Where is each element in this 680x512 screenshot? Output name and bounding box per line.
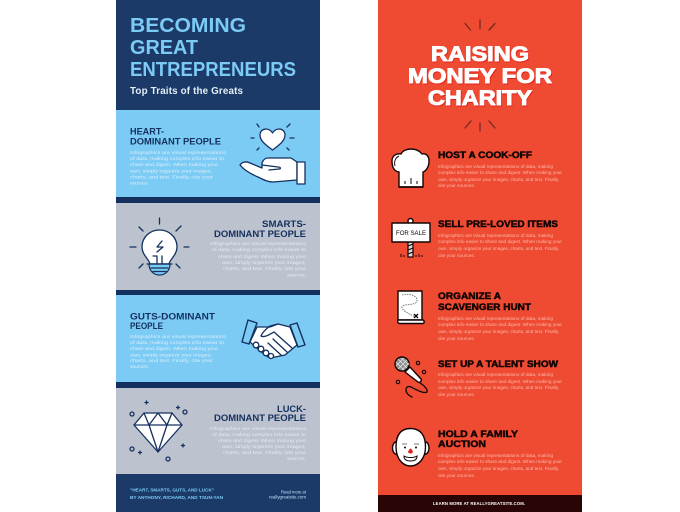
- body text: complex info easier to share and digest. When making your: [438, 379, 562, 384]
- body text: cite your sources.: [438, 392, 475, 397]
- footer: learn more: [378, 495, 582, 512]
- heading: PEOPLE: [130, 321, 163, 331]
- icon: microphone: [395, 357, 427, 397]
- heading: DOMINANT PEOPLE: [130, 136, 221, 146]
- icon: chef hat: [392, 149, 429, 187]
- heading: SELL PRE-LOVED ITEMS: [438, 219, 558, 229]
- body text: [130, 150, 227, 186]
- body text: cite your sources.: [438, 336, 475, 341]
- title: MONEY FOR: [409, 66, 553, 89]
- body text: [438, 233, 562, 258]
- read more link: reallygreatsite.com: [269, 494, 306, 500]
- body text: cite your sources.: [438, 253, 475, 258]
- rays above title: [465, 20, 495, 30]
- body text: sources.: [287, 272, 306, 278]
- body text: of data, making complex info easier to: [212, 432, 306, 438]
- title: RAISING: [432, 44, 530, 67]
- body text: Infographics are visual representations of data, making: [438, 164, 553, 169]
- item: organize a scavenger hunt: [398, 291, 562, 341]
- footer: sources: [116, 474, 320, 512]
- body text: share and digest. When making your: [130, 346, 218, 352]
- body text: own, simply organize your images,: [130, 168, 212, 174]
- body text: Infographics are visual representations of data, making: [438, 233, 553, 238]
- subtitle: Top Traits of the Greats: [130, 86, 244, 97]
- heading: DOMINANT PEOPLE: [214, 413, 306, 423]
- body text: sources.: [130, 364, 149, 370]
- body text: own, simply organize your images, charts, and text. Finally,: [438, 177, 559, 182]
- heading: DOMINANT PEOPLE: [214, 229, 306, 239]
- section: luck-dominant people: [116, 388, 320, 474]
- body text: share and digest. When making your: [130, 162, 218, 168]
- body text: [130, 334, 227, 370]
- icon: treasure map: [398, 291, 424, 324]
- body text: charts, and text. Finally, cite your: [130, 358, 213, 364]
- heading: GUTS-DOMINANT: [130, 311, 215, 321]
- body text: of data, making complex info easier to: [130, 156, 224, 162]
- body text: complex info easier to share and digest. When making your: [438, 322, 562, 327]
- body text: [210, 426, 307, 462]
- icon: handshake: [242, 320, 305, 358]
- body text: Infographics are visual representations: [210, 241, 307, 247]
- heading: LUCK-: [277, 404, 306, 414]
- body text: charts, and text. Finally, cite your: [130, 174, 213, 180]
- heading: [438, 429, 518, 449]
- heading: [214, 404, 306, 423]
- section: heart-dominant people: [116, 110, 320, 197]
- heading: SET UP A TALENT SHOW: [438, 359, 559, 369]
- heading: AUCTION: [438, 439, 486, 449]
- body text: of data, making complex info easier to: [212, 247, 306, 253]
- heading: [130, 126, 221, 146]
- icon: for sale sign: [392, 218, 430, 257]
- title: CHARITY: [428, 87, 532, 110]
- title: [408, 43, 553, 111]
- body text: Infographics are visual representations: [130, 334, 227, 340]
- body text: cite your sources.: [438, 473, 475, 478]
- panel: raising money for charity: [378, 0, 582, 512]
- heading: [438, 291, 532, 312]
- body text: Infographics are visual representations: [210, 426, 307, 432]
- item: set up a talent show: [395, 357, 562, 397]
- body text: own, simply organize your images, charts, and text. Finally,: [438, 329, 559, 334]
- body text: charts, and text. Finally, cite your: [223, 450, 306, 456]
- body text: Infographics are visual representations of data, making: [438, 316, 553, 321]
- heading: SCAVENGER HUNT: [438, 302, 532, 312]
- body text: complex info easier to share and digest. When making your: [438, 170, 562, 175]
- body text: own, simply organize your images,: [222, 260, 306, 266]
- icon: light bulb: [130, 218, 189, 275]
- heading: [214, 219, 306, 239]
- body text: complex info easier to share and digest. When making your: [438, 459, 562, 464]
- body text: sources.: [287, 456, 306, 462]
- read more link: [269, 490, 307, 500]
- body text: complex info easier to share and digest. When making your: [438, 239, 562, 244]
- citation: BY ANTHONY, RICHARD, AND TSUN-YAN: [130, 495, 223, 500]
- title: ENTREPRENEURS: [130, 58, 296, 81]
- body text: own, simply organize your images,: [130, 352, 212, 358]
- body text: cite your sources.: [438, 183, 475, 188]
- heading: HOLD A FAMILY: [438, 429, 518, 439]
- body text: charts, and text. Finally, cite your: [223, 266, 306, 272]
- body text: Infographics are visual representations: [130, 150, 227, 156]
- icon: clown face: [392, 428, 429, 466]
- body text: [438, 372, 562, 397]
- heading: HEART-: [130, 126, 164, 136]
- body text: sources.: [130, 180, 149, 186]
- body text: own, simply organize your images, charts, and text. Finally,: [438, 246, 559, 251]
- body text: share and digest. When making your: [218, 438, 306, 444]
- title: CHARITY: [429, 88, 533, 111]
- rays below title: [465, 121, 495, 131]
- icon: for sale sign: FOR SALE: [396, 230, 426, 237]
- heading: SMARTS-: [262, 219, 306, 229]
- body text: [438, 316, 562, 341]
- title: [130, 14, 296, 81]
- body text: own, simply organize your images, charts, and text. Finally,: [438, 385, 559, 390]
- body text: [210, 241, 307, 278]
- title: BECOMING: [130, 14, 246, 37]
- panel: becoming great entrepreneurs: [116, 0, 320, 512]
- heading: HOST A COOK-OFF: [438, 150, 533, 160]
- icon: hand holding heart: [240, 124, 305, 184]
- title: GREAT: [130, 36, 198, 59]
- citation: "HEART, SMARTS, GUTS, AND LUCK": [130, 488, 214, 492]
- section: guts-dominant people: [116, 295, 320, 382]
- footer: learn more: LEARN MORE AT REALLYGREATSITE.COM.: [433, 501, 525, 506]
- body text: Infographics are visual representations of data, making: [438, 453, 553, 458]
- heading: [130, 311, 215, 331]
- item: hold a family auction: [392, 428, 562, 478]
- item: host a cook-off: [392, 149, 562, 188]
- title: MONEY FOR: [408, 65, 552, 88]
- body text: of data, making complex info easier to: [130, 340, 224, 346]
- header panel: [116, 0, 320, 110]
- body text: [438, 453, 562, 478]
- icon: diamond: [130, 401, 187, 461]
- body text: Infographics are visual representations of data, making: [438, 372, 553, 377]
- heading: ORGANIZE A: [438, 291, 502, 301]
- section: smarts-dominant people: [116, 203, 320, 290]
- body text: [438, 164, 562, 188]
- body text: own, simply organize your images, charts, and text. Finally,: [438, 466, 559, 471]
- body text: own, simply organize your images,: [222, 444, 306, 450]
- title: RAISING: [431, 43, 529, 66]
- citation: [130, 488, 223, 500]
- read more link: Read more at: [281, 490, 307, 494]
- item: sell pre-loved items: [392, 218, 562, 258]
- body text: share and digest. When making your: [218, 254, 306, 260]
